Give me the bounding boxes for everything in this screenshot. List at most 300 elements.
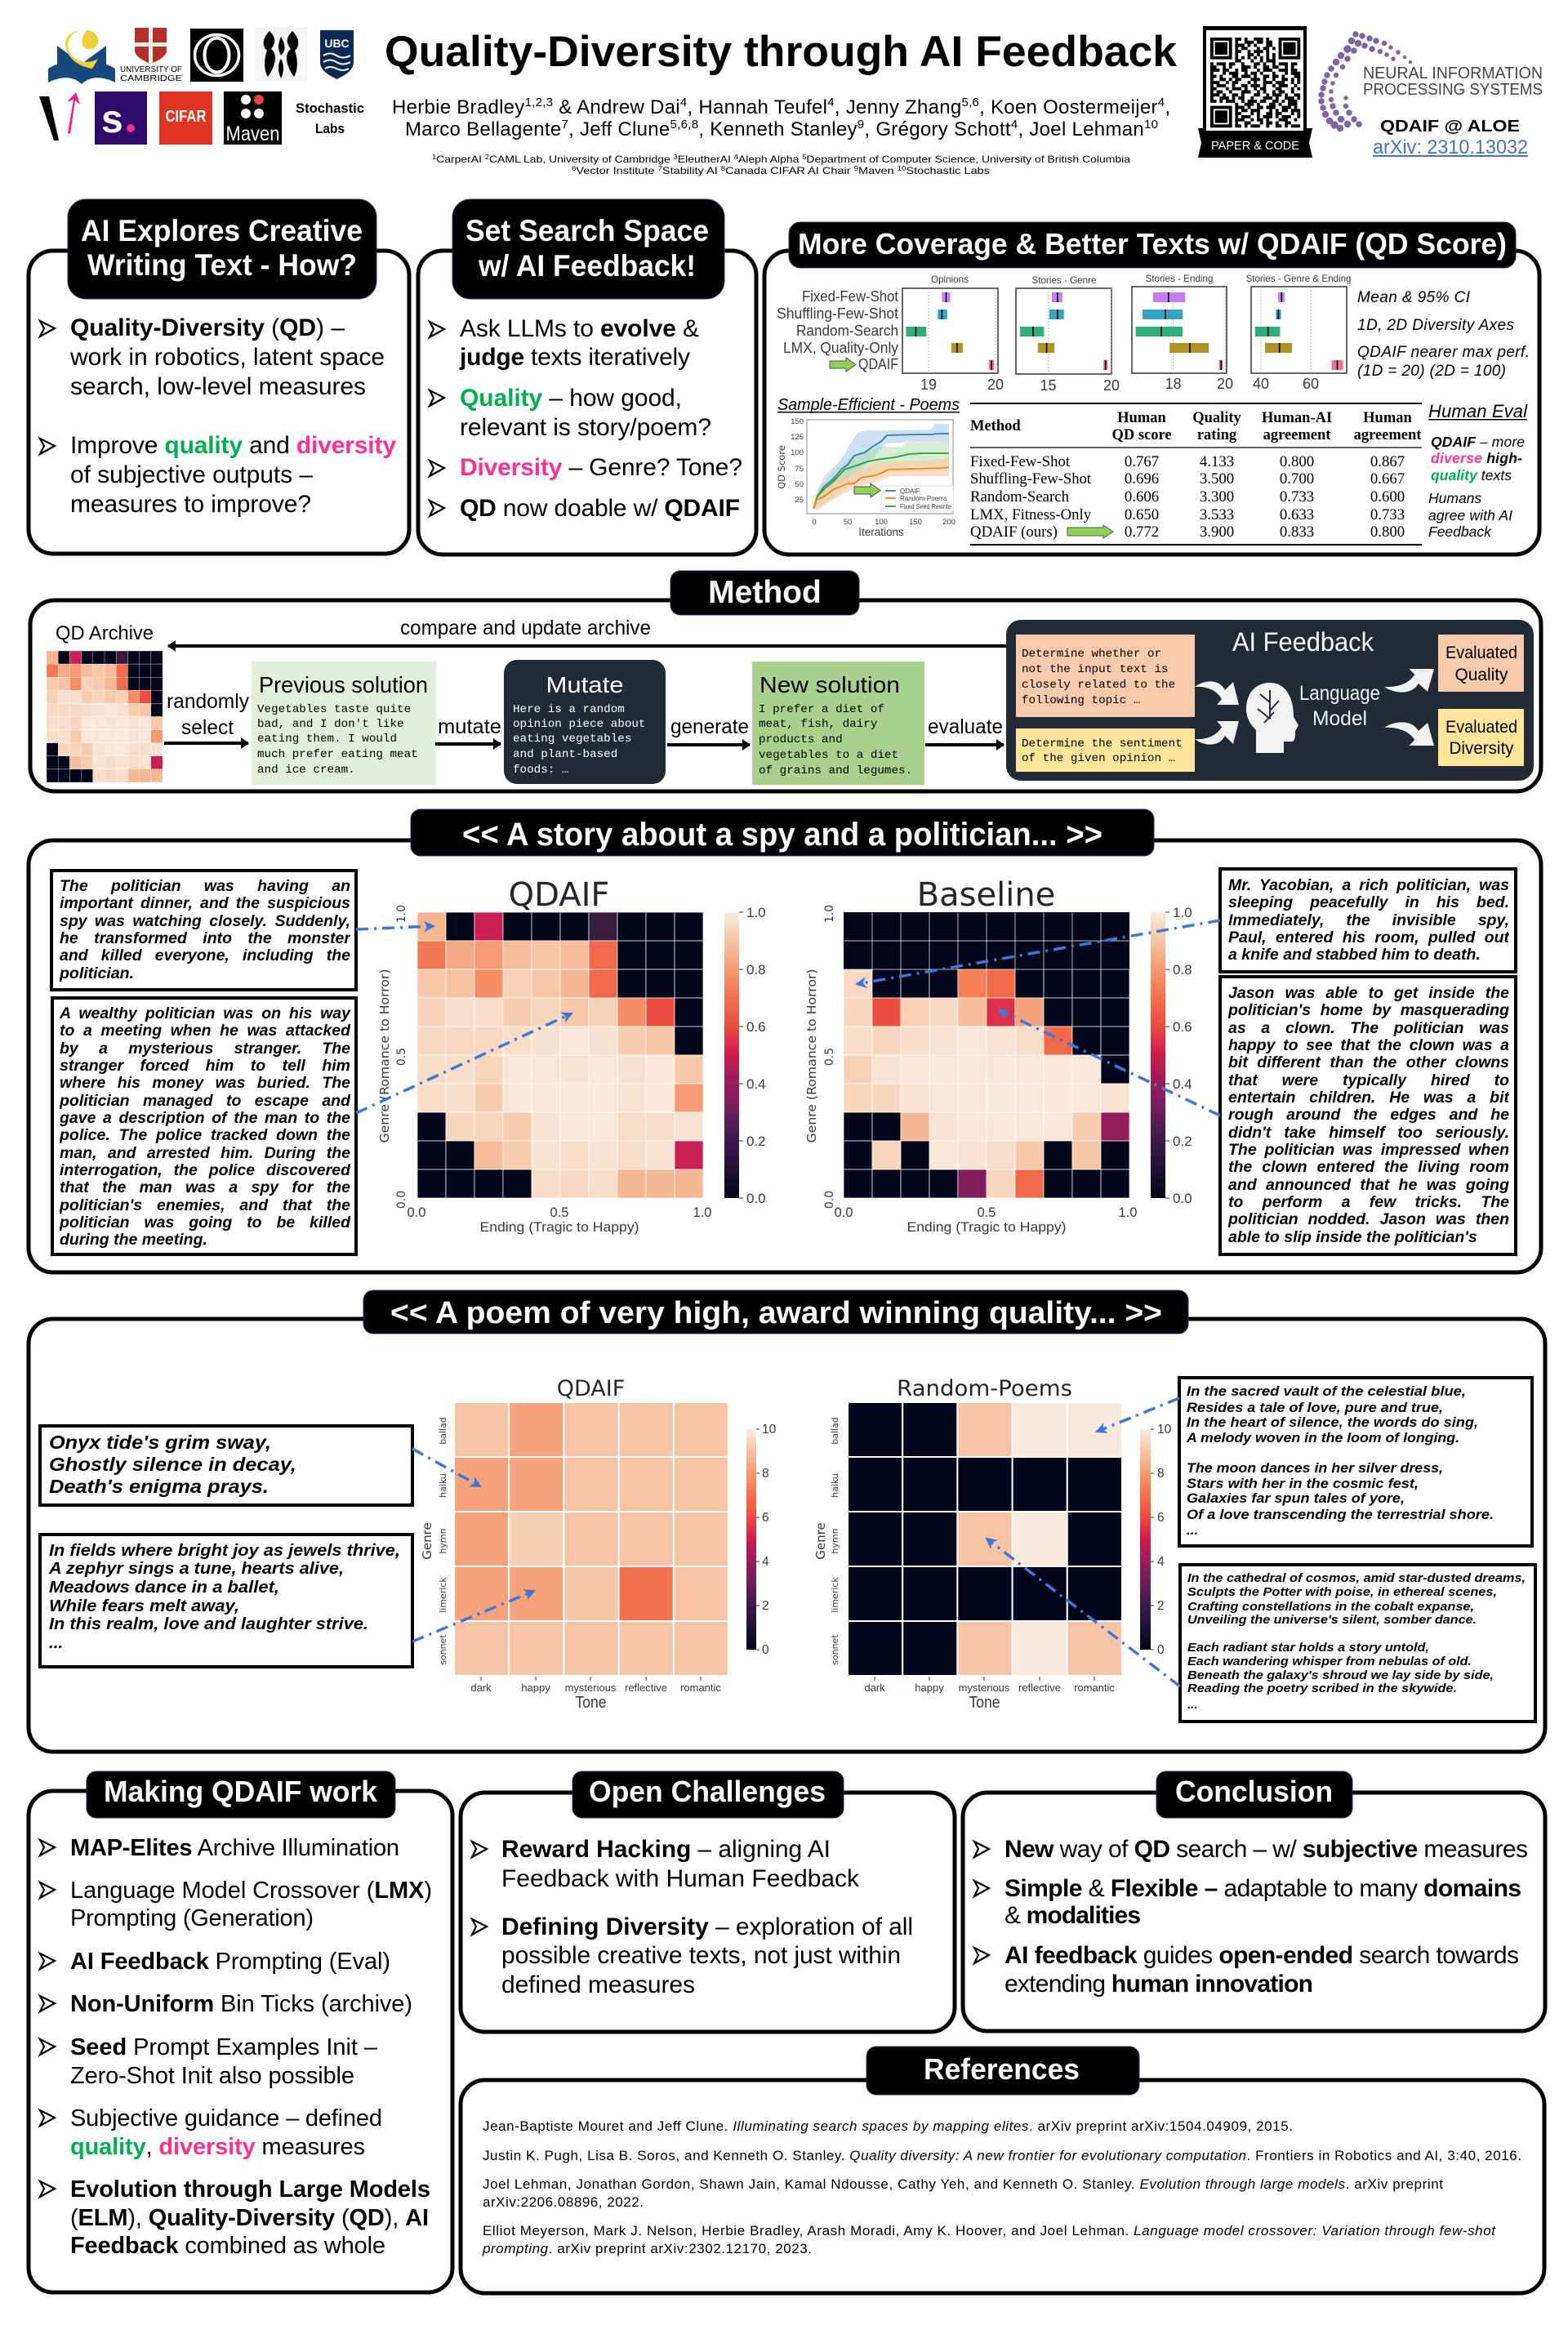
bullet: quality-diversity: search, low-level measures [70, 373, 366, 400]
logo: Vector Institute [39, 92, 80, 140]
bullet: simple and flexible [974, 1875, 1521, 1929]
affiliations: 2 [485, 154, 490, 161]
chart: archive heatmap [47, 651, 163, 782]
story box: monster dinner: and killed everyone, including the [60, 947, 350, 964]
affiliations: Stability AI [662, 165, 721, 176]
reference list: Jean-Baptiste Mouret and Jeff Clune. Illuminating search spaces by mapping elites. arXiv preprint arXiv:1504.04909, 2015. [483, 2118, 1293, 2134]
reference list [482, 2118, 1521, 2256]
colorbar: 0.6 [1173, 1019, 1192, 1035]
arrow: quality prompt to model [1195, 681, 1239, 705]
poem box: celestial blue: Stars with her in the cosmic fest, [1187, 1476, 1419, 1491]
story box: Mr. Yacobian: Paul, entered his room, pulled out [1228, 929, 1509, 947]
human eval notes: QDAIF – more [1431, 434, 1525, 450]
arrow: story to QDAIF cell 1 [356, 926, 434, 929]
table: human evaluation: 0.772 [1125, 523, 1159, 541]
affiliations: 3 [674, 154, 678, 161]
authors: & Andrew Dai [553, 96, 680, 118]
logo: University of Cambridge [120, 28, 182, 83]
table: human evaluation: 0.696 [1125, 470, 1159, 488]
box: new solution: vegetables to a diet [759, 749, 898, 762]
bullet: ELM combined [40, 2176, 430, 2259]
bullet: quality: Quality – how good, [460, 385, 682, 412]
affiliations: Department of Computer Science, University of British Columbia [806, 154, 1130, 165]
axes: Tone [575, 1694, 606, 1712]
story box: monster dinner: he transformed into the monster [60, 929, 350, 947]
affiliations: Aleph Alpha [738, 154, 802, 165]
chart: opinions: 19 [920, 376, 937, 393]
table: human evaluation: Method [970, 418, 1021, 434]
logo: UBC shield [320, 30, 354, 79]
reference list: prompting. arXiv preprint arXiv:2302.12170, 2023. [482, 2241, 812, 2256]
colorbar [746, 1423, 777, 1657]
chart notes: 1D, 2D Diversity Axes [1357, 317, 1514, 334]
colorbar: 4 [1157, 1555, 1165, 1569]
story box: wealthy politician: stranger forced him to tell him [60, 1057, 350, 1075]
poem box: limerick [40, 1535, 412, 1667]
chart: QD score intervals by method [777, 273, 1351, 394]
story box: Mr. Yacobian: Mr. Yacobian, a rich politician, was [1228, 876, 1509, 894]
bullet: improve quality and diversity: of subjective outputs – [70, 461, 313, 488]
box: previous solution: Previous solution [259, 672, 428, 697]
logo: Stability AI [95, 91, 147, 145]
axis ticks: 75 [795, 465, 804, 474]
box: new solution: meat, fish, dairy [759, 718, 878, 731]
table: human evaluation: 3.533 [1200, 506, 1234, 523]
table: human evaluation: rating [1197, 427, 1237, 443]
logo: NeurIPS dots and name: PROCESSING SYSTEMS [1363, 81, 1543, 99]
human eval notes: Human Eval [1428, 401, 1528, 421]
story box: monster dinner: politician. [60, 964, 134, 982]
table: human evaluation: LMX, Fitness-Only [970, 506, 1092, 523]
logo: Maven [224, 91, 282, 145]
colorbar: 0 [1157, 1643, 1165, 1657]
method row labels [777, 288, 898, 372]
story box: wealthy politician: politician managed to escape and [60, 1092, 350, 1110]
colorbar: 6 [1157, 1511, 1165, 1525]
poem box: celestial blue: In the sacred vault of the celestial blue, [1187, 1383, 1466, 1399]
story box: wealthy politician: gave a description of the man to the [60, 1109, 350, 1127]
poem box: celestial blue: ... [1187, 1522, 1198, 1538]
box: previous solution: eating them. I would [257, 733, 397, 746]
table: human evaluation: agreement [1263, 427, 1331, 443]
story box: Jason the clown: bit different than the other clowns [1228, 1054, 1509, 1071]
colorbar: 10 [762, 1423, 777, 1437]
bullet: AI feedback guides search: extending human innovation [1004, 1971, 1313, 1998]
box: evaluated diversity: Evaluated [1446, 718, 1517, 737]
poem box: haiku: Ghostly silence in decay, [49, 1454, 296, 1475]
poem box: celestial blue: In the heart of silence, the words do sing, [1187, 1414, 1478, 1430]
axes: hymn [830, 1528, 840, 1554]
box: new solution [752, 662, 924, 785]
story box: monster dinner [51, 871, 356, 990]
table: human evaluation: 0.800 [1280, 453, 1314, 470]
poem box: cathedral of cosmos: Sculpts the Potter with poise, in ethereal scenes, [1187, 1585, 1497, 1599]
axes: sonnet [438, 1634, 448, 1665]
label: language model: Language [1299, 682, 1380, 705]
arrow: celestial poem to cell [1097, 1398, 1179, 1432]
axes [377, 905, 711, 1235]
story box: wealthy politician: police. The police tracked down the [60, 1126, 350, 1144]
authors: , Jeff Clune [568, 118, 670, 140]
story box: Jason the clown: didn't take himself too seriously. [1228, 1124, 1509, 1142]
chart: opinions [902, 274, 1004, 393]
bullet: new way of QD search: New way of QD search – w/ subjective measures [1004, 1836, 1528, 1863]
chart notes: Mean & 95% CI [1357, 289, 1471, 306]
legend: Fixed Seed Rewrite [900, 503, 951, 510]
affiliations: Maven [858, 165, 898, 176]
heading [68, 199, 376, 299]
colorbar: 0.0 [746, 1191, 766, 1206]
method row labels: QDAIF [858, 356, 898, 372]
arrow: QDAIF row [1067, 525, 1113, 538]
axes: 0.5 [395, 1048, 408, 1066]
bullet: AI feedback guides search: AI feedback guides open-ended search towards [1004, 1942, 1519, 1969]
QR code: paper and code: PAPER & CODE [1211, 139, 1299, 153]
bullet: LMX: Language Model Crossover (LMX) [70, 1878, 432, 1904]
story box: Jason the clown: politician nodded. Jason was then [1228, 1210, 1509, 1228]
heading: AI Explores Creative [81, 214, 363, 247]
chart notes [1357, 289, 1530, 380]
affiliations: EleutherAI [678, 154, 734, 165]
box: mutate prompt: opinion piece about [513, 718, 645, 731]
arrow: model to quality [1384, 669, 1434, 693]
heading [1156, 1771, 1352, 1818]
story box: wealthy politician: interrogation, the police discovered [60, 1161, 350, 1179]
method row labels: LMX, Quality-Only [783, 340, 898, 356]
logo: NeurIPS dots and name: NEURAL INFORMATION [1363, 65, 1543, 82]
bullet: reward hacking: Feedback with Human Feedback [501, 1865, 860, 1892]
bullet: subjective guidance: quality, diversity measures [70, 2134, 365, 2160]
logo: EleutherAI [255, 27, 307, 81]
bullet: quality [430, 385, 711, 441]
colorbar: 2 [1157, 1599, 1165, 1613]
poem box: celestial blue: Of a love transcending the terrestrial shore. [1187, 1507, 1494, 1522]
table: human evaluation: 0.600 [1370, 488, 1405, 506]
arrow: compare and update archive: compare and update archive [400, 617, 651, 639]
panel: AI explores creative writing [29, 199, 409, 554]
story box: Jason the clown: that were typically hired to [1228, 1071, 1509, 1089]
legend [881, 486, 953, 511]
poem box: celestial blue: Resides a tale of love, pure and true, [1187, 1400, 1443, 1415]
story box: Mr. Yacobian: sleeping peacefully in his bed. [1228, 893, 1509, 911]
story box: wealthy politician: A wealthy politician was on his way [60, 1004, 350, 1022]
chart: stories genre: Stories - Genre [1032, 274, 1097, 286]
table: human evaluation: 3.300 [1200, 488, 1234, 506]
colorbar [724, 905, 766, 1206]
prompt: diversity: of the given opinion … [1022, 752, 1175, 765]
table: human evaluation: 0.633 [1280, 506, 1314, 523]
arXiv link: arXiv: 2310.13032 [1373, 136, 1528, 158]
story box: Jason the clown: the clown entered the living room [1228, 1158, 1509, 1176]
logo: Stochastic Labs: Stochastic [296, 100, 364, 116]
colorbar: 0.2 [746, 1134, 766, 1149]
colorbar: 1.0 [746, 905, 766, 920]
method row labels: Fixed-Few-Shot [802, 288, 898, 305]
box: evaluated quality: Evaluated [1446, 644, 1517, 662]
box: previous solution: Vegetables taste quite [257, 703, 411, 716]
chart: stories genre: 20 [1103, 377, 1120, 394]
heatmap: random poems: Random-Poems [897, 1376, 1072, 1401]
axis ticks: 50 [795, 480, 804, 489]
axis ticks: 100 [875, 518, 888, 527]
colorbar: 0.8 [746, 962, 766, 978]
bullet: LMX [40, 1878, 432, 1931]
arrow: diversity prompt to model [1195, 721, 1239, 745]
legend: Random-Poems [900, 495, 947, 502]
chart: stories ending: Stories - Ending [1145, 273, 1214, 284]
poem box: limerick: A zephyr sings a tune, hearts alive, [48, 1559, 344, 1578]
heading: << A poem of very high, award winning quality... >> [390, 1296, 1162, 1330]
logo: Stochastic Labs: Labs [315, 121, 345, 136]
method row labels: Random-Search [796, 323, 898, 339]
axis ticks: 50 [844, 518, 852, 527]
prompt: quality: closely related to the [1022, 679, 1175, 692]
table: human evaluation: 0.700 [1280, 470, 1314, 488]
chart: opinions: Opinions [931, 274, 969, 285]
axes: Ending (Tragic to Happy) [906, 1219, 1067, 1235]
arrow: QDAIF marker [830, 358, 856, 372]
poem box: cathedral of cosmos: Reading the poetry scribed in the skywide. [1187, 1682, 1457, 1695]
poem box: celestial blue: Galaxies far spun tales of yore, [1187, 1490, 1405, 1506]
table: human evaluation: 0.733 [1370, 506, 1405, 523]
human eval notes: diverse high- [1431, 450, 1522, 466]
icon: brain in head [1246, 683, 1298, 753]
arrow: randomly select: randomly [167, 690, 249, 713]
table: human evaluation: Fixed-Few-Shot [970, 453, 1071, 470]
heading: Set Search Space [466, 214, 709, 247]
axes: romantic [680, 1682, 721, 1694]
chart: stories genre and ending: 60 [1303, 376, 1319, 392]
arrow: mutate: mutate [438, 715, 501, 738]
bullet: improve quality and diversity: Improve quality and diversity [70, 432, 396, 459]
poem box: limerick: In this realm, love and laughter strive. [49, 1615, 368, 1633]
axis ticks [791, 417, 956, 527]
axes: romantic [1074, 1682, 1115, 1694]
arrow: model to diversity [1384, 722, 1434, 746]
bullet: MAP-Elites: MAP-Elites Archive Illumination [70, 1835, 399, 1861]
title: Quality-Diversity through AI Feedback [385, 28, 1178, 76]
table: human evaluation: agreement [1354, 427, 1422, 443]
affiliations: 9 [854, 165, 859, 172]
axes: happy [915, 1682, 944, 1694]
poem box: cathedral of cosmos: ... [1187, 1698, 1198, 1712]
affiliations: 6 [572, 165, 577, 172]
bullet: quality-diversity: work in robotics, latent space [69, 344, 385, 371]
heading: Method [708, 575, 822, 610]
affiliations: Stochastic Labs [906, 165, 990, 176]
human eval notes [1428, 401, 1528, 540]
colorbar: 4 [762, 1555, 769, 1569]
bullet: simple and flexible: Simple & Flexible – adaptable to many domains [1004, 1875, 1521, 1902]
table: human evaluation: 0.767 [1125, 453, 1159, 470]
bullet: diversity: Diversity – Genre? Tone? [460, 454, 742, 481]
authors: Marco Bellagente [405, 118, 561, 140]
chart: sample-efficient poems [776, 396, 960, 538]
heading: AI feedback: AI Feedback [1232, 627, 1374, 657]
bullet: non-uniform bins: Non-Uniform Bin Ticks (archive) [70, 1991, 412, 2017]
axes: dark [864, 1682, 885, 1694]
affiliations: 8 [721, 165, 726, 172]
logo: CIFAR [159, 91, 212, 145]
table: human evaluation: 4.133 [1200, 453, 1234, 470]
authors: 9 [858, 118, 864, 131]
authors: 4 [827, 96, 835, 109]
bullet: ELM combined: (ELM), Quality-Diversity (QD), AI [70, 2205, 429, 2231]
story box: Mr. Yacobian: a knife and stabbed him to death. [1228, 946, 1481, 964]
bullet: reward hacking: Reward Hacking – aligning AI [501, 1836, 831, 1863]
authors: 4 [1011, 118, 1018, 131]
table: human evaluation: 0.606 [1125, 488, 1159, 506]
axes: 0.5 [978, 1205, 996, 1220]
heading: Conclusion [1175, 1775, 1333, 1808]
authors: 1,2,3 [525, 96, 553, 109]
panel: conclusion [963, 1771, 1545, 2031]
panel: poem examples [29, 1290, 1545, 1752]
prompt: quality: Determine whether or [1022, 648, 1161, 661]
reference list: Justin K. Pugh, Lisa B. Soros, and Kenneth O. Stanley. Quality diversity: A new frontier for evolutionary computation. Frontiers in Robotics and AI, 3:40, 2016. [483, 2148, 1521, 2163]
label: QD archive: QD Archive [56, 622, 154, 644]
heading: << A story about a spy and a politician... >> [462, 817, 1102, 853]
axes: Genre [813, 1522, 828, 1560]
bullet: AI feedback guides search [974, 1942, 1519, 1998]
story box: monster dinner: important dinner, and the suspicious [60, 894, 350, 912]
affiliations: Vector Institute [576, 165, 658, 176]
colorbar: 0.8 [1173, 962, 1192, 978]
chart: sample-efficient poems: Iterations [858, 526, 904, 538]
box: previous solution: and ice cream. [257, 764, 355, 777]
bullet: ELM combined: Evolution through Large Models [70, 2176, 430, 2203]
bullet: QD now doable: QD now doable w/ QDAIF [460, 495, 740, 522]
poem box: celestial blue [1179, 1378, 1532, 1546]
heading: Open Challenges [589, 1775, 826, 1808]
reference list: arXiv:2206.08896, 2022. [483, 2194, 644, 2210]
box: new solution: products and [759, 733, 843, 746]
story box: wealthy politician: politician was going to be killed [60, 1214, 350, 1232]
arrow: limerick to cell [412, 1591, 534, 1642]
box: mutate prompt: eating vegetables [513, 733, 631, 746]
axes: 1.0 [395, 905, 408, 923]
bullet: seed prompts: Zero-Shot Init also possible [70, 2063, 354, 2089]
colorbar: 1.0 [1173, 905, 1192, 920]
poem box: haiku [40, 1426, 412, 1505]
arrow: randomly select: select [181, 716, 234, 739]
colorbar: 0.4 [746, 1076, 766, 1092]
box: previous solution: much prefer eating meat [257, 748, 418, 761]
panel: method [30, 571, 1541, 791]
story box: wealthy politician: to a meeting when he was attacked [60, 1022, 350, 1040]
bullet: defining diversity: Defining Diversity – exploration of all [501, 1913, 913, 1940]
human eval notes: quality texts [1431, 467, 1512, 483]
panel: open challenges [461, 1771, 955, 2032]
table: human evaluation: QD score [1111, 427, 1172, 443]
QR code: paper and code [1198, 26, 1312, 158]
heading [411, 809, 1154, 856]
label: language model [1299, 682, 1380, 730]
box: previous solution [252, 662, 436, 785]
poem box: haiku: Death's enigma prays. [49, 1476, 269, 1497]
axis ticks: 150 [909, 518, 922, 527]
affiliations: 1 [432, 154, 437, 161]
affiliations: CarperAI [436, 154, 485, 165]
poem box: limerick: In fields where bright joy as jewels thrive, [49, 1541, 400, 1560]
table: human evaluation: Human [1363, 410, 1413, 426]
table: human evaluation: 3.500 [1200, 470, 1234, 488]
axes: 0.0 [823, 1191, 836, 1209]
axes: 1.0 [823, 905, 836, 923]
arrow: QDAIF curve [854, 483, 880, 497]
story box: wealthy politician: man, and arrested him. During the [60, 1144, 350, 1162]
axes: mysterious [959, 1682, 1010, 1694]
prompt: diversity [1016, 728, 1195, 772]
story box: wealthy politician [52, 998, 356, 1254]
axes: Genre [420, 1522, 434, 1560]
affiliations: CAML Lab, University of Cambridge [489, 154, 674, 165]
axes: 0.0 [408, 1205, 425, 1220]
table: human evaluation [970, 403, 1422, 545]
label: language model: Model [1312, 707, 1367, 730]
heatmap: QDAIF stories [377, 876, 766, 1235]
story box: monster dinner: The politician was having an [60, 877, 350, 895]
box: evaluated quality: Quality [1455, 666, 1508, 684]
box: new solution: I prefer a diet of [759, 703, 884, 716]
bullet: quality-diversity [40, 314, 385, 400]
bullet: subjective guidance [40, 2105, 382, 2160]
arrow: story to baseline cell 1 [857, 920, 1220, 984]
story box: monster dinner: spy was watching closely. Suddenly, [60, 912, 350, 930]
colorbar: 8 [1157, 1467, 1165, 1481]
heatmap: baseline stories [804, 876, 1192, 1235]
chart: stories genre and ending: Stories - Genre & Ending [1246, 273, 1351, 284]
axes: 0.5 [550, 1205, 568, 1220]
authors [392, 96, 1170, 140]
story box: Jason the clown: politician's home by masquerading [1228, 1001, 1509, 1019]
poem box: cathedral of cosmos [1180, 1565, 1535, 1722]
arrow: story to baseline cell 2 [999, 1010, 1220, 1116]
affiliations: 4 [734, 154, 739, 161]
axes: Tone [969, 1694, 1000, 1712]
bullet: subjective guidance: Subjective guidance – defined [70, 2105, 382, 2132]
axis ticks: 100 [791, 448, 804, 457]
story box: wealthy politician: during the meeting. [60, 1231, 207, 1249]
authors: , Koen Oostermeijer [979, 96, 1157, 118]
bullet: defining diversity [472, 1913, 913, 1998]
authors: 10 [1144, 118, 1158, 131]
arrow: cathedral poem to cell [987, 1539, 1180, 1686]
colorbar: 8 [762, 1467, 769, 1481]
authors: , [1165, 96, 1170, 118]
authors: Herbie Bradley [392, 96, 524, 118]
story box: Jason the clown: rough around the edges and he [1228, 1106, 1509, 1124]
heatmap: QDAIF poems: QDAIF [557, 1376, 625, 1401]
arrow: haiku to cell [412, 1449, 480, 1486]
axis ticks: 25 [795, 496, 804, 505]
affiliations: 10 [898, 165, 906, 172]
axes: reflective [1018, 1682, 1061, 1694]
authors: 7 [561, 118, 568, 131]
bullet: seed prompts [40, 2034, 378, 2089]
logo: CIFAR: CIFAR [165, 108, 207, 126]
heading: More Coverage & Better Texts w/ QDAIF (QD Score) [798, 227, 1507, 261]
poem box: cathedral of cosmos: Unveiling the universe's silent, somber dance. [1187, 1613, 1477, 1627]
axes: sonnet [830, 1634, 840, 1665]
table: human evaluation: 0.867 [1370, 453, 1405, 470]
bullet: quality: relevant is story/poem? [460, 414, 711, 441]
table: human evaluation: Random-Search [970, 488, 1070, 506]
arrow: evaluate: evaluate [928, 715, 1003, 738]
colorbar: 10 [1157, 1423, 1172, 1437]
heading: References [924, 2052, 1080, 2086]
story box: Mr. Yacobian: Immediately, the invisible spy, [1228, 911, 1509, 929]
